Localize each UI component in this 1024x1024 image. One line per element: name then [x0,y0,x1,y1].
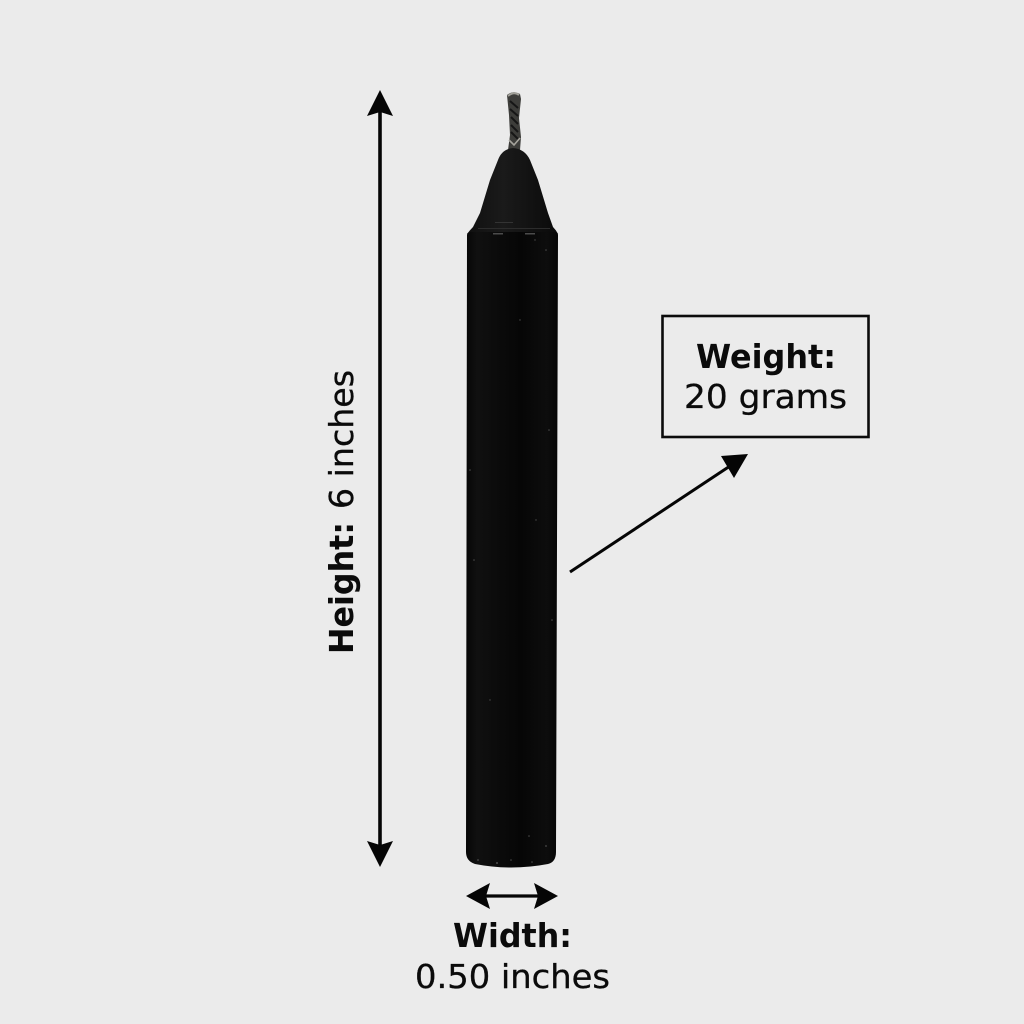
height label: Height: [322,522,361,654]
candle body [466,232,558,868]
height arrow [367,90,393,867]
candle wick [507,92,521,150]
weight callout box [662,316,868,437]
height label: 6 inches [322,370,361,509]
width arrow [466,883,558,909]
weight callout box: 20 grams [684,377,847,416]
candle surface marks [469,222,553,864]
width label: Width: [453,916,572,955]
candle tip [467,148,558,234]
weight callout box: Weight: [696,337,836,376]
candle [466,92,558,867]
height label [322,370,361,654]
weight arrow [570,454,748,572]
width label [415,916,610,996]
width label: 0.50 inches [415,957,610,996]
